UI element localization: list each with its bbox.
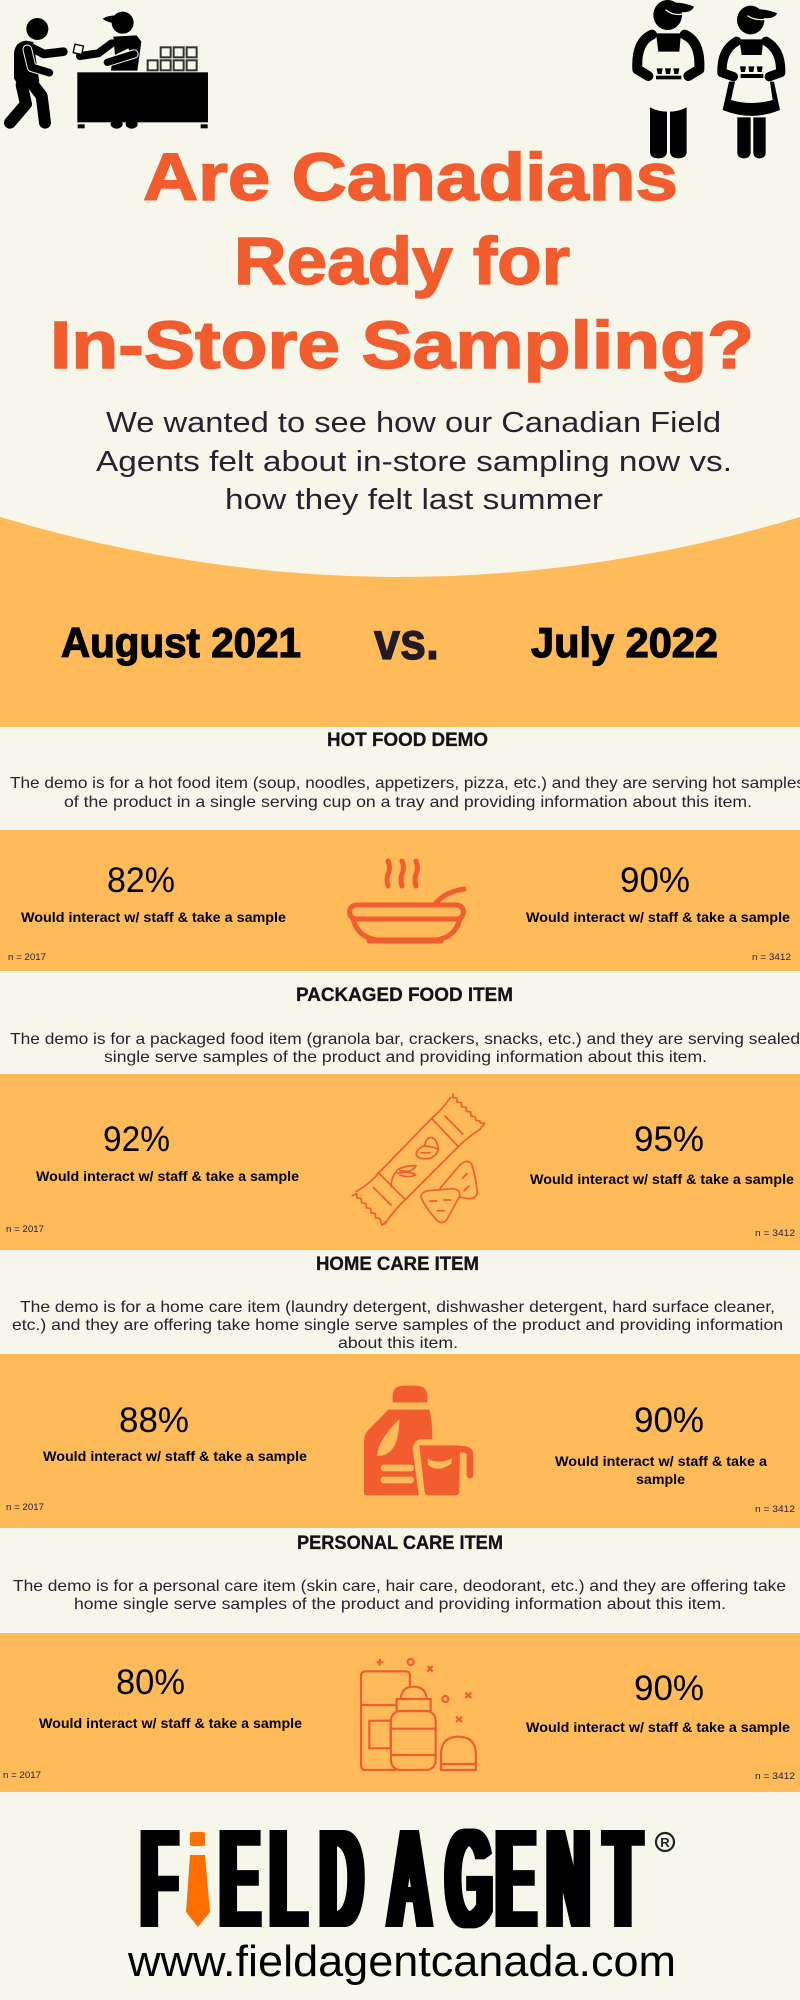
heading: vs.: vs. xyxy=(374,613,439,671)
sample size left: n = 2017 xyxy=(3,1770,41,1781)
text: personal care description: The demo is for a personal care item (skin care, hair care, deodorant, etc.) and they are offering take xyxy=(13,1578,786,1595)
text: hot food description xyxy=(10,775,800,811)
icon: customer being served at sampling counter xyxy=(10,12,208,129)
sample size right: n = 3412 xyxy=(755,1228,795,1239)
heading: packaged food item: PACKAGED FOOD ITEM xyxy=(296,985,513,1006)
text: packaged food description xyxy=(10,1031,800,1066)
stat label right: Would interact w/ staff & take a sample xyxy=(530,1171,794,1187)
sample size right: n = 3412 xyxy=(755,1771,795,1782)
icon: personal care bottles xyxy=(361,1659,476,1770)
title xyxy=(50,140,754,383)
title: In-Store Sampling? xyxy=(50,308,754,383)
text: home care description xyxy=(12,1299,783,1352)
subtitle: Agents felt about in-store sampling now vs. xyxy=(96,446,732,478)
subtitle xyxy=(96,407,732,516)
band: personal care results xyxy=(0,1633,800,1792)
logo: registered mark: R xyxy=(660,1835,670,1850)
stat: August 2021 82%: 82% xyxy=(107,861,175,900)
stat label right: Would interact w/ staff & take a xyxy=(555,1453,767,1469)
logo: Field Agent: AGENT xyxy=(388,1799,641,1957)
stat label right: sample xyxy=(636,1471,685,1487)
icon: steaming bowl xyxy=(350,861,464,941)
sample size left: n = 2017 xyxy=(6,1502,44,1513)
band: home care results xyxy=(0,1354,800,1528)
stat: August 2021 88%: 88% xyxy=(119,1401,189,1440)
panel: date comparison banner with curved top xyxy=(0,517,800,727)
website url: www.fieldagentcanada.com xyxy=(127,1937,676,1986)
heading: July 2022: July 2022 xyxy=(531,619,718,666)
logo: Field Agent xyxy=(141,1799,674,1957)
stat label left: Would interact w/ staff & take a sample xyxy=(36,1168,299,1184)
stat: July 2022 90%: 90% xyxy=(620,861,690,900)
text: home care description: etc.) and they are offering take home single serve samples of the product and providing information xyxy=(12,1317,783,1334)
stat label right xyxy=(555,1453,767,1487)
logo: Field Agent: F xyxy=(141,1799,177,1957)
sample size right: n = 3412 xyxy=(752,952,791,963)
logo: Field Agent: ELD xyxy=(220,1799,363,1957)
stat label left: Would interact w/ staff & take a sample xyxy=(39,1715,302,1731)
text: hot food description: of the product in a single serving cup on a tray and providing information about this item. xyxy=(64,794,752,811)
text: packaged food description: The demo is for a packaged food item (granola bar, crackers, snacks, etc.) and they are serving sealed xyxy=(10,1031,800,1048)
sample size right: n = 3412 xyxy=(755,1504,795,1515)
band: packaged food results xyxy=(0,1074,800,1250)
panel: hot food demo xyxy=(0,730,800,971)
title: Are Canadians xyxy=(143,140,678,215)
logo: tie letter i xyxy=(186,1832,210,1927)
stat: July 2022 90%: 90% xyxy=(634,1669,704,1708)
text: packaged food description: single serve samples of the product and providing information about this item. xyxy=(104,1049,707,1066)
stat label left: Would interact w/ staff & take a sample xyxy=(21,909,286,925)
sample size left: n = 2017 xyxy=(6,1224,44,1235)
icon: two sampling staff in aprons xyxy=(637,0,781,158)
subtitle: how they felt last summer xyxy=(225,484,603,516)
stat: July 2022 90%: 90% xyxy=(634,1401,704,1440)
text: home care description: The demo is for a home care item (laundry detergent, dishwasher detergent, hard surface cleaner, xyxy=(20,1299,775,1316)
logo: Field Agent: I xyxy=(194,1847,201,1915)
heading: August 2021: August 2021 xyxy=(61,619,301,666)
logo: registered mark xyxy=(656,1833,674,1851)
heading: hot food demo: HOT FOOD DEMO xyxy=(327,730,488,751)
subtitle: We wanted to see how our Canadian Field xyxy=(106,407,721,439)
heading: personal care item: PERSONAL CARE ITEM xyxy=(297,1533,503,1554)
stat label left: Would interact w/ staff & take a sample xyxy=(43,1448,307,1464)
text: hot food description: The demo is for a hot food item (soup, noodles, appetizers, pizza, etc.) and they are serving hot samples xyxy=(10,775,800,792)
icon: granola bar and crackers xyxy=(352,1094,485,1225)
panel: home care item xyxy=(0,1254,800,1528)
stat label right: Would interact w/ staff & take a sample xyxy=(526,1719,790,1735)
panel: packaged food item xyxy=(0,985,800,1250)
text: personal care description xyxy=(13,1578,786,1613)
stat: August 2021 80%: 80% xyxy=(116,1663,185,1702)
sample size left: n = 2017 xyxy=(8,952,46,963)
heading: home care item: HOME CARE ITEM xyxy=(316,1254,479,1275)
stat: August 2021 92%: 92% xyxy=(103,1120,170,1159)
text: home care description: about this item. xyxy=(338,1335,458,1352)
stat label right: Would interact w/ staff & take a sample xyxy=(526,909,790,925)
icon: detergent bottle and cup xyxy=(364,1386,470,1495)
band: hot food results xyxy=(0,830,800,971)
text: personal care description: home single serve samples of the product and providing information about this item. xyxy=(74,1596,726,1613)
stat: July 2022 95%: 95% xyxy=(634,1120,704,1159)
title: Ready for xyxy=(234,224,570,299)
panel: personal care item xyxy=(0,1533,800,1792)
